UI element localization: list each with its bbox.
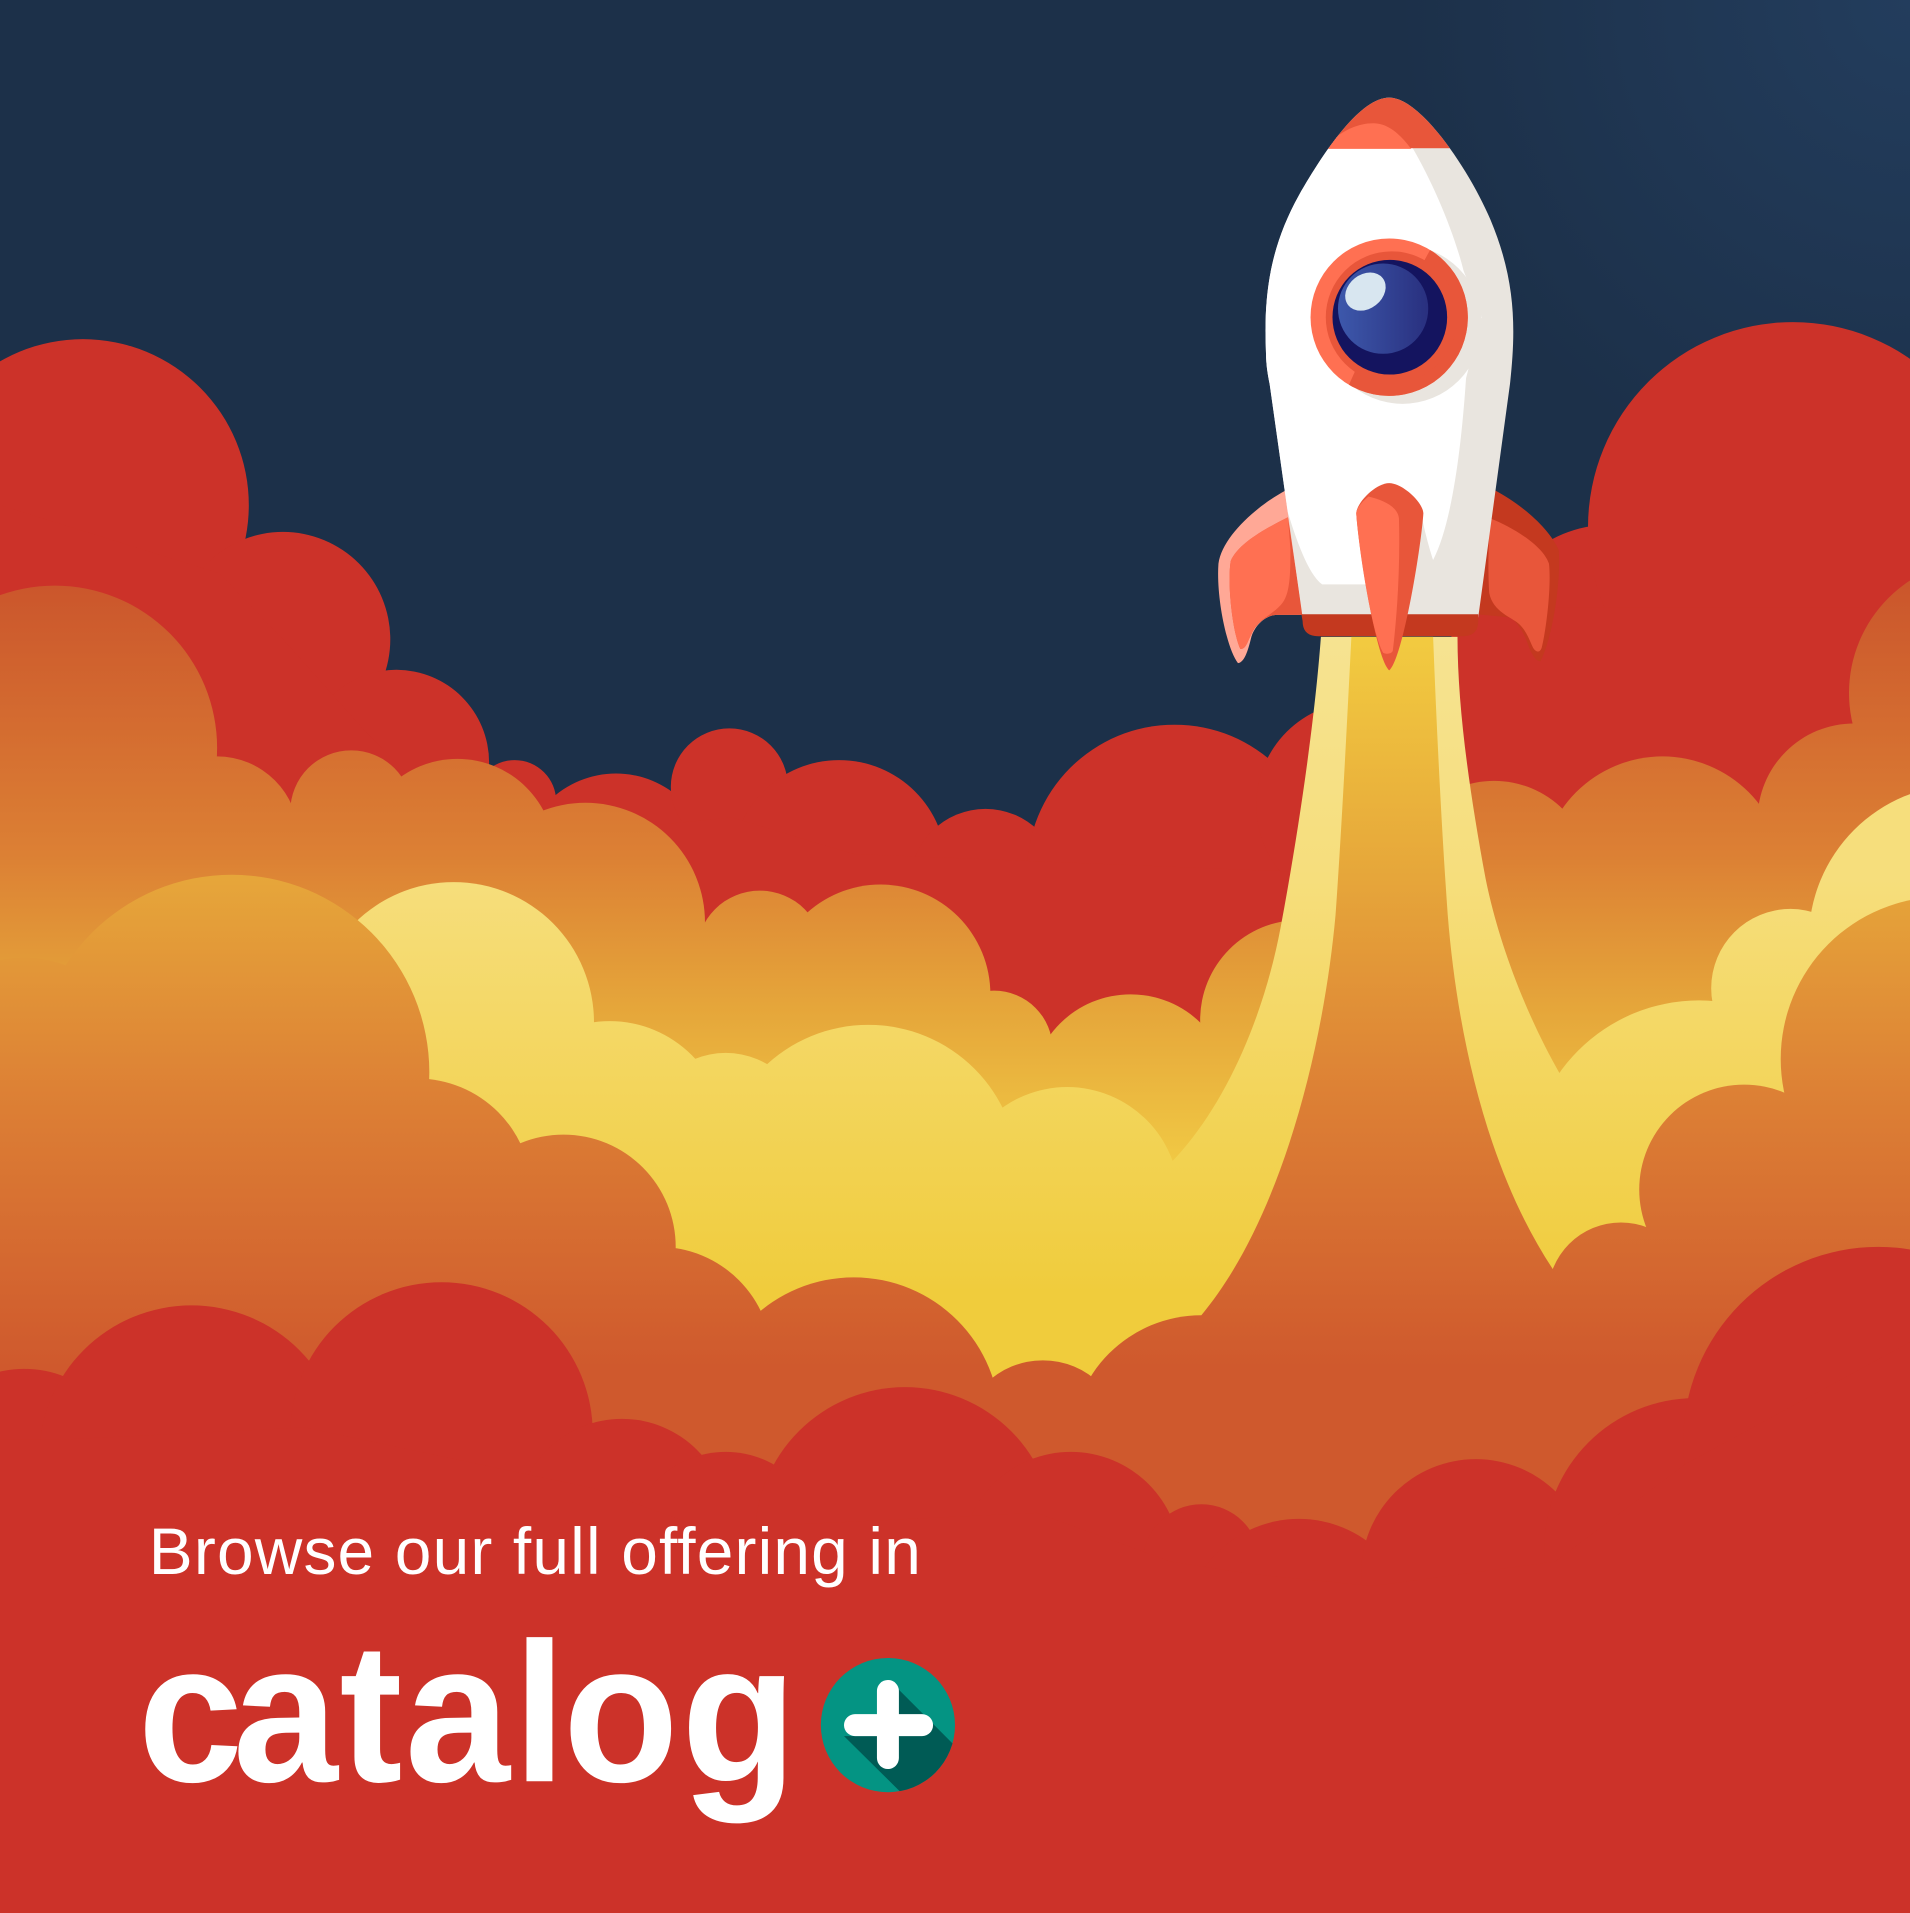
centre fin bbox=[1356, 483, 1423, 670]
exhaust plume bbox=[1165, 637, 1634, 1342]
body highlight bbox=[1265, 137, 1482, 584]
call to action text: Browse our full offering in bbox=[149, 1514, 921, 1588]
rocket bbox=[1218, 98, 1559, 670]
catalog wordmark: catalog bbox=[138, 1602, 797, 1824]
left fin bbox=[1218, 490, 1303, 663]
orange smoke cloud bbox=[0, 559, 1910, 1342]
back red smoke cloud bbox=[0, 322, 1910, 1342]
nose cone bbox=[1328, 98, 1450, 149]
icon: plus badge bbox=[820, 1658, 955, 1792]
right fin bbox=[1470, 490, 1559, 661]
porthole window bbox=[1310, 238, 1482, 404]
rocket body bbox=[1265, 98, 1513, 617]
engine base bbox=[1301, 614, 1478, 636]
front red cloud bbox=[0, 1247, 1910, 1913]
yellow smoke cloud bbox=[313, 784, 1910, 1398]
front orange cloud and inner flame bbox=[0, 637, 1910, 1586]
